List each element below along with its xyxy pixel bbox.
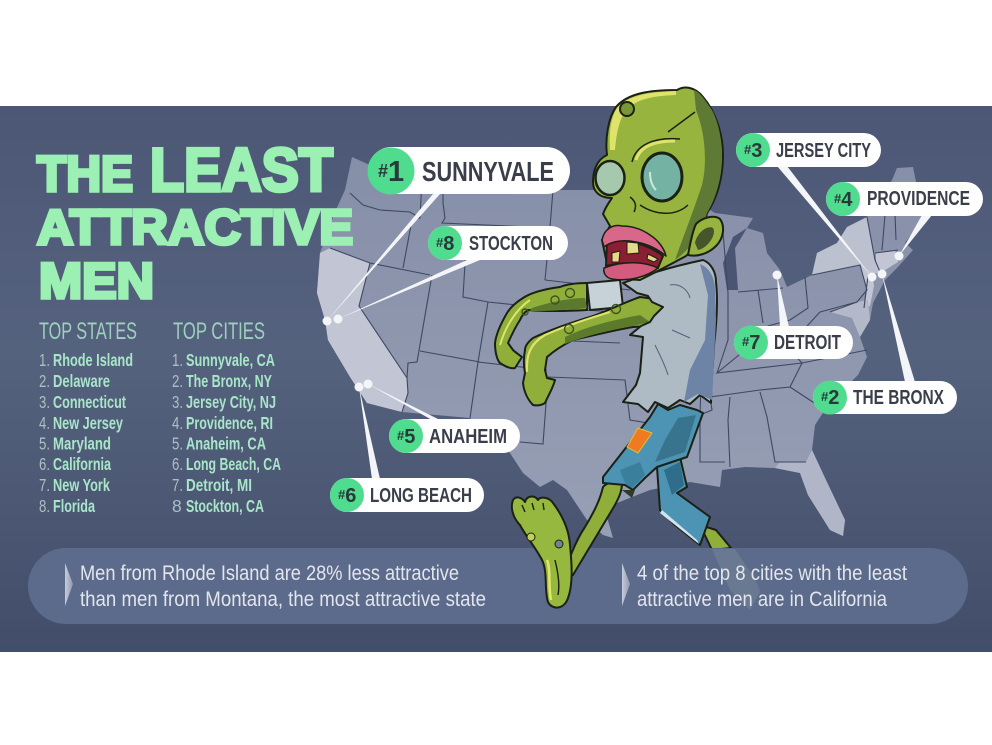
- zombie head: [593, 88, 723, 280]
- list: top cities: Stockton, CA: [186, 496, 264, 516]
- list: top states: New Jersey: [53, 413, 123, 433]
- list: top states: 7.: [39, 475, 50, 495]
- label: #3 Jersey City: #: [744, 142, 752, 157]
- highlighted top states: [317, 248, 408, 412]
- callout: California fact: [622, 562, 907, 611]
- list: top states: Connecticut: [53, 392, 126, 412]
- list: top cities: 1.: [172, 350, 183, 370]
- forehead highlight: [610, 91, 676, 150]
- list: top cities: 7.: [172, 475, 183, 495]
- list: top cities: Anaheim, CA: [186, 434, 266, 454]
- list: top states: 3.: [39, 392, 50, 412]
- connector: Jersey City: [777, 166, 872, 277]
- label: #8 Stockton: [428, 226, 568, 260]
- label: #5 Anaheim: ANAHEIM: [429, 426, 507, 448]
- label: #6 Long Beach: #: [338, 487, 346, 502]
- arrow: left callout: [65, 563, 73, 606]
- connector: Anaheim: [368, 384, 440, 420]
- list: top states: 8.: [39, 496, 50, 516]
- zombie jeans: [603, 404, 703, 498]
- right eye: [642, 153, 682, 201]
- list: top cities: The Bronx, NY: [186, 371, 272, 391]
- list: top states: New York: [53, 475, 110, 495]
- background panel: [0, 106, 992, 652]
- list: top cities: Sunnyvale, CA: [186, 350, 275, 370]
- label: #5 Anaheim: [389, 419, 520, 453]
- connector: Detroit: [777, 275, 789, 327]
- map of the United States: [317, 157, 930, 538]
- label: #8 Stockton: STOCKTON: [469, 233, 553, 255]
- connector: Providence: [899, 215, 932, 256]
- heading: top states: TOP STATES: [39, 318, 137, 345]
- title: ATTRACTIVE: [37, 201, 353, 255]
- label: #8 Stockton: 8: [443, 233, 454, 255]
- forehead bump: [620, 102, 634, 116]
- list: top states: Florida: [53, 496, 95, 516]
- list: top states: [39, 318, 137, 516]
- title: THE: [37, 146, 133, 202]
- dark lake Michigan: [723, 228, 747, 290]
- label: #2 The Bronx: #: [821, 389, 829, 404]
- bottom callout bar: [28, 548, 968, 624]
- city pin dots: [322, 252, 904, 392]
- list: top cities: 6.: [172, 454, 183, 474]
- connector: Long Beach: [359, 387, 380, 479]
- open mouth: [606, 240, 663, 268]
- title: LEAST: [150, 136, 333, 204]
- label: #2 The Bronx: [813, 380, 957, 414]
- list: top cities: [172, 318, 281, 516]
- list: top states: Rhode Island: [53, 350, 133, 370]
- label: #8 Stockton: #: [436, 235, 444, 250]
- label: #2 The Bronx: 2: [828, 387, 839, 409]
- list: top states: 6.: [39, 454, 50, 474]
- label: #4 Providence: 4: [841, 189, 853, 211]
- callout: California fact: 4 of the top 8 cities with the least: [637, 562, 907, 585]
- list: top cities: 3.: [172, 392, 183, 412]
- connector lines from city pins to labels: [327, 166, 932, 479]
- label: #1 Sunnyvale: [368, 147, 570, 194]
- orange patch: [627, 428, 652, 453]
- list: top cities: Long Beach, CA: [186, 454, 281, 474]
- zombie shirt: [623, 260, 717, 412]
- connector: The Bronx: [882, 274, 915, 382]
- teeth: [612, 242, 658, 262]
- connector: Sunnyvale: [327, 194, 440, 321]
- label: #5 Anaheim: 5: [404, 426, 415, 448]
- faded foot seen through the bar: [712, 549, 760, 610]
- label: #1 Sunnyvale: 1: [388, 156, 404, 188]
- list: top states: 5.: [39, 434, 50, 454]
- list: top states: 1.: [39, 350, 50, 370]
- zombie: [495, 88, 723, 608]
- label: #3 Jersey City: [736, 133, 881, 167]
- list: top states: Maryland: [53, 434, 111, 454]
- list: top states: 4.: [39, 413, 50, 433]
- nose: [630, 197, 635, 212]
- brow: [636, 141, 675, 160]
- label: #6 Long Beach: LONG BEACH: [370, 485, 472, 507]
- list: top states: California: [53, 454, 111, 474]
- zombie front leg and foot: [512, 482, 622, 608]
- zombie front arm and hand: [522, 288, 665, 405]
- list: top cities: 8: [172, 496, 182, 516]
- shaded back of head: [675, 90, 722, 260]
- list: top states: Delaware: [53, 371, 110, 391]
- list: top cities: Jersey City, NJ: [186, 392, 276, 412]
- list: top states: 2.: [39, 371, 50, 391]
- state borders: [330, 178, 898, 467]
- label: #1 Sunnyvale: SUNNYVALE: [422, 156, 554, 187]
- ear: [688, 217, 723, 256]
- label: #4 Providence: [826, 182, 983, 216]
- upper lip: [602, 226, 666, 256]
- label: #6 Long Beach: [330, 478, 484, 512]
- callout: Rhode Island fact: than men from Montana, the most attractive state: [80, 588, 486, 611]
- callout: Rhode Island fact: Men from Rhode Island are 28% less attractive: [80, 562, 459, 585]
- label: #7 Detroit: 7: [749, 332, 760, 354]
- lower lip: [604, 263, 658, 280]
- title: [37, 136, 353, 309]
- label: #7 Detroit: #: [742, 334, 750, 349]
- zombie back arm: [495, 280, 623, 368]
- heading: top cities: TOP CITIES: [173, 318, 265, 345]
- callout: Rhode Island fact: [65, 562, 486, 611]
- label: #7 Detroit: [734, 326, 853, 360]
- eye bags: [640, 205, 688, 213]
- label: #6 Long Beach: 6: [345, 485, 356, 507]
- label: #7 Detroit: DETROIT: [774, 332, 841, 354]
- title: MEN: [39, 253, 154, 309]
- list: top cities: 5.: [172, 434, 183, 454]
- zombie back leg: [657, 457, 731, 550]
- list: top cities: Providence, RI: [186, 413, 273, 433]
- connector: Stockton: [338, 260, 480, 319]
- left eye: [596, 161, 624, 195]
- label: #4 Providence: #: [834, 191, 842, 206]
- label: #5 Anaheim: #: [397, 428, 405, 443]
- callout: California fact: attractive men are in California: [637, 588, 887, 611]
- list: top cities: Detroit, MI: [186, 475, 252, 495]
- label: #3 Jersey City: 3: [751, 140, 762, 162]
- label: #3 Jersey City: JERSEY CITY: [776, 140, 871, 162]
- label: #2 The Bronx: THE BRONX: [853, 387, 944, 409]
- list: top cities: 2.: [172, 371, 183, 391]
- arrow: right callout: [622, 563, 630, 606]
- label: #1 Sunnyvale: #: [378, 161, 388, 181]
- list: top cities: 4.: [172, 413, 183, 433]
